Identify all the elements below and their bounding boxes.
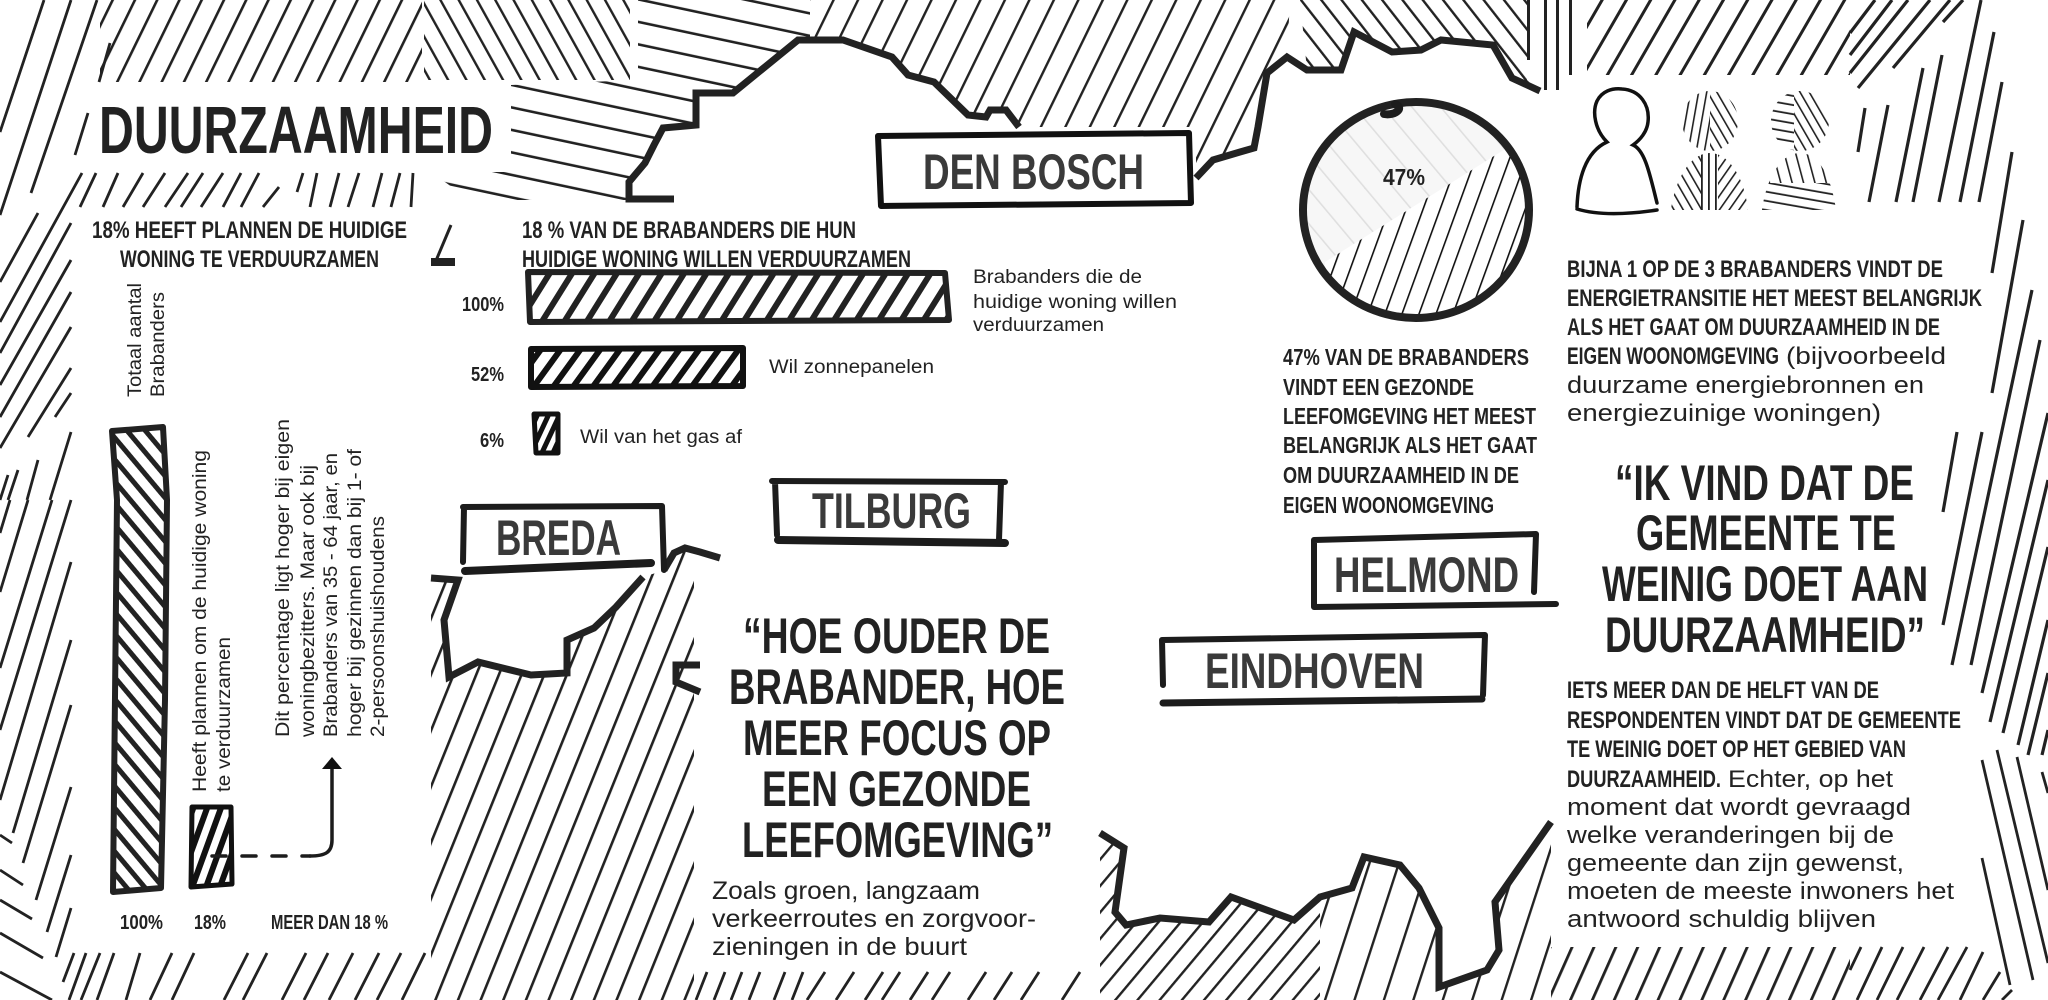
text: iets meer dan de helft: TE WEINIG DOET OP HET GEBIED VAN [1567, 736, 1906, 763]
city label: Eindhoven [1162, 635, 1485, 703]
text: bijna 1 op de 3 [1567, 256, 1983, 427]
quote: hoe ouder de Brabander: MEER FOCUS OP [743, 710, 1051, 766]
text: 47 procent gezonde leefomgeving: OM DUURZAAMHEID IN DE [1283, 462, 1519, 488]
text: bijna 1 op de 3: (bijvoorbeeld [1786, 343, 1946, 370]
heading: verduurzamen chart: 18 % VAN DE BRABANDERS DIE HUN [522, 217, 856, 244]
icon: person hatched 2 [1670, 90, 1749, 211]
axis labels: 100% [120, 912, 163, 934]
quote: gemeente te weinig: “IK VIND DAT DE [1615, 455, 1914, 511]
text: bijna 1 op de 3: duurzame energiebronnen en [1567, 372, 1924, 399]
text: iets meer dan de helft: DUURZAAMHEID. [1567, 766, 1721, 793]
panel: verduurzamen chart [462, 217, 1177, 453]
text: meer dan 18 procent toelichting: 2-persoonshuishoudens [368, 516, 389, 737]
text: zoals groen: zieningen in de buurt [712, 933, 967, 961]
text: bijna 1 op de 3: BIJNA 1 OP DE 3 BRABANDERS VINDT DE [1567, 256, 1943, 283]
axis labels: 18% [194, 912, 226, 934]
heading: 18 procent plannen: 18% HEEFT PLANNEN DE HUIDIGE [92, 217, 407, 244]
text: meer dan 18 procent toelichting [273, 419, 389, 738]
quote: hoe ouder de Brabander: “HOE OUDER DE [743, 608, 1050, 664]
row: 6 procent [480, 414, 743, 453]
label: totaal aantal Brabanders: Totaal aantal [125, 283, 146, 397]
text: bijna 1 op de 3: ALS HET GAAT OM DUURZAAMHEID IN DE [1567, 314, 1940, 341]
quote: gemeente te weinig: WEINIG DOET AAN [1602, 556, 1928, 612]
text: zoals groen: Zoals groen, langzaam [712, 877, 980, 905]
axis labels: MEER DAN 18 % [271, 912, 388, 934]
city label: Den Bosch: DEN BOSCH [923, 144, 1144, 200]
row: 100 procent: verduurzamen [973, 315, 1104, 336]
bar: 18 procent [191, 807, 232, 887]
city label: Helmond: HELMOND [1334, 547, 1519, 603]
text: zoals groen: verkeerroutes en zorgvoor- [712, 905, 1036, 933]
text: iets meer dan de helft: welke veranderingen bij de [1566, 822, 1894, 849]
city label: Breda: BREDA [496, 510, 621, 566]
label: heeft plannen: te verduurzamen [214, 637, 235, 792]
text: meer dan 18 procent toelichting: hoger bij gezinnen dan bij 1- of [345, 448, 366, 737]
row: 6 procent: Wil van het gas af [580, 427, 743, 448]
city label: Tilburg [772, 481, 1005, 543]
text: meer dan 18 procent toelichting: Dit percentage ligt hoger bij eigen [273, 419, 294, 737]
heading: 18 procent plannen [92, 217, 407, 273]
row: 52 procent: 52% [471, 364, 504, 386]
text: meer dan 18 procent toelichting: woningbezitters. Maar ook bij [298, 465, 319, 738]
city label: Helmond [1314, 534, 1556, 607]
text: iets meer dan de helft: moment dat wordt gevraagd [1567, 794, 1911, 821]
row: 100 procent [462, 267, 1177, 336]
text: zoals groen [712, 877, 1036, 961]
quote: hoe ouder de Brabander: BRABANDER, HOE [729, 659, 1065, 715]
row: 100 procent: huidige woning willen [973, 292, 1177, 313]
city label: Tilburg: TILBURG [812, 483, 971, 539]
quote: gemeente te weinig: DUURZAAMHEID” [1605, 607, 1925, 663]
label: totaal aantal Brabanders: Brabanders [148, 292, 169, 397]
row: 100 procent: 100% [462, 294, 504, 316]
city label: Breda [463, 506, 664, 571]
quote: hoe ouder de Brabander: LEEFOMGEVING” [742, 812, 1053, 868]
text: meer dan 18 procent toelichting: Brabanders van 35 - 64 jaar, en [321, 453, 342, 737]
text: 47 procent gezonde leefomgeving: LEEFOMGEVING HET MEEST [1283, 403, 1536, 429]
row: 52 procent: Wil zonnepanelen [769, 357, 934, 378]
arrow: dashed to note [212, 757, 342, 856]
heading: 18 procent plannen: WONING TE VERDUURZAMEN [120, 246, 379, 273]
text: 47 procent gezonde leefomgeving: BELANGRIJK ALS HET GAAT [1283, 432, 1537, 458]
text: iets meer dan de helft: Echter, op het [1728, 766, 1893, 793]
icon: person outline [1577, 89, 1657, 214]
text: 47 procent gezonde leefomgeving: 47% VAN DE BRABANDERS [1283, 344, 1529, 370]
title: DUURZAAMHEID [99, 93, 493, 168]
axis labels [120, 912, 388, 934]
text: bijna 1 op de 3: EIGEN WOONOMGEVING [1567, 343, 1779, 370]
pie chart: 47 procent [1300, 100, 1540, 330]
city label: Eindhoven: EINDHOVEN [1205, 643, 1424, 699]
province map outline [431, 32, 1551, 987]
row: 100 procent: Brabanders die de [973, 267, 1142, 288]
text: 47 procent gezonde leefomgeving: EIGEN WOONOMGEVING [1283, 492, 1494, 518]
text: 47 procent gezonde leefomgeving: VINDT EEN GEZONDE [1283, 374, 1474, 400]
label: heeft plannen: Heeft plannen om de huidige woning [190, 450, 211, 792]
heading: verduurzamen chart [522, 217, 911, 273]
text: iets meer dan de helft: moeten de meeste inwoners het [1567, 878, 1954, 905]
quote: gemeente te weinig: GEMEENTE TE [1636, 505, 1896, 561]
quote: gemeente te weinig [1602, 455, 1928, 663]
pie chart: 47 procent: 47% [1383, 164, 1425, 190]
text: bijna 1 op de 3: energiezuinige woningen) [1567, 400, 1881, 427]
bar: 100 procent [112, 427, 167, 892]
text: iets meer dan de helft [1566, 677, 1961, 933]
icon: person hatched 3 [1762, 90, 1838, 211]
text: 47 procent gezonde leefomgeving [1283, 344, 1537, 518]
text: iets meer dan de helft: antwoord schuldig blijven [1567, 906, 1876, 933]
text: iets meer dan de helft: gemeente dan zijn gewenst, [1567, 850, 1904, 877]
panel: 18 procent plannen [92, 217, 407, 934]
city label: Den Bosch [878, 133, 1191, 206]
row: 6 procent: 6% [480, 430, 504, 452]
quote: hoe ouder de Brabander [729, 608, 1065, 868]
label: totaal aantal Brabanders [125, 283, 169, 397]
label: heeft plannen [190, 450, 235, 792]
text: iets meer dan de helft: IETS MEER DAN DE HELFT VAN DE [1567, 677, 1879, 704]
heading: verduurzamen chart: HUIDIGE WONING WILLEN VERDUURZAMEN [522, 246, 911, 273]
quote: hoe ouder de Brabander: EEN GEZONDE [762, 761, 1031, 817]
row: 52 procent [471, 348, 934, 387]
